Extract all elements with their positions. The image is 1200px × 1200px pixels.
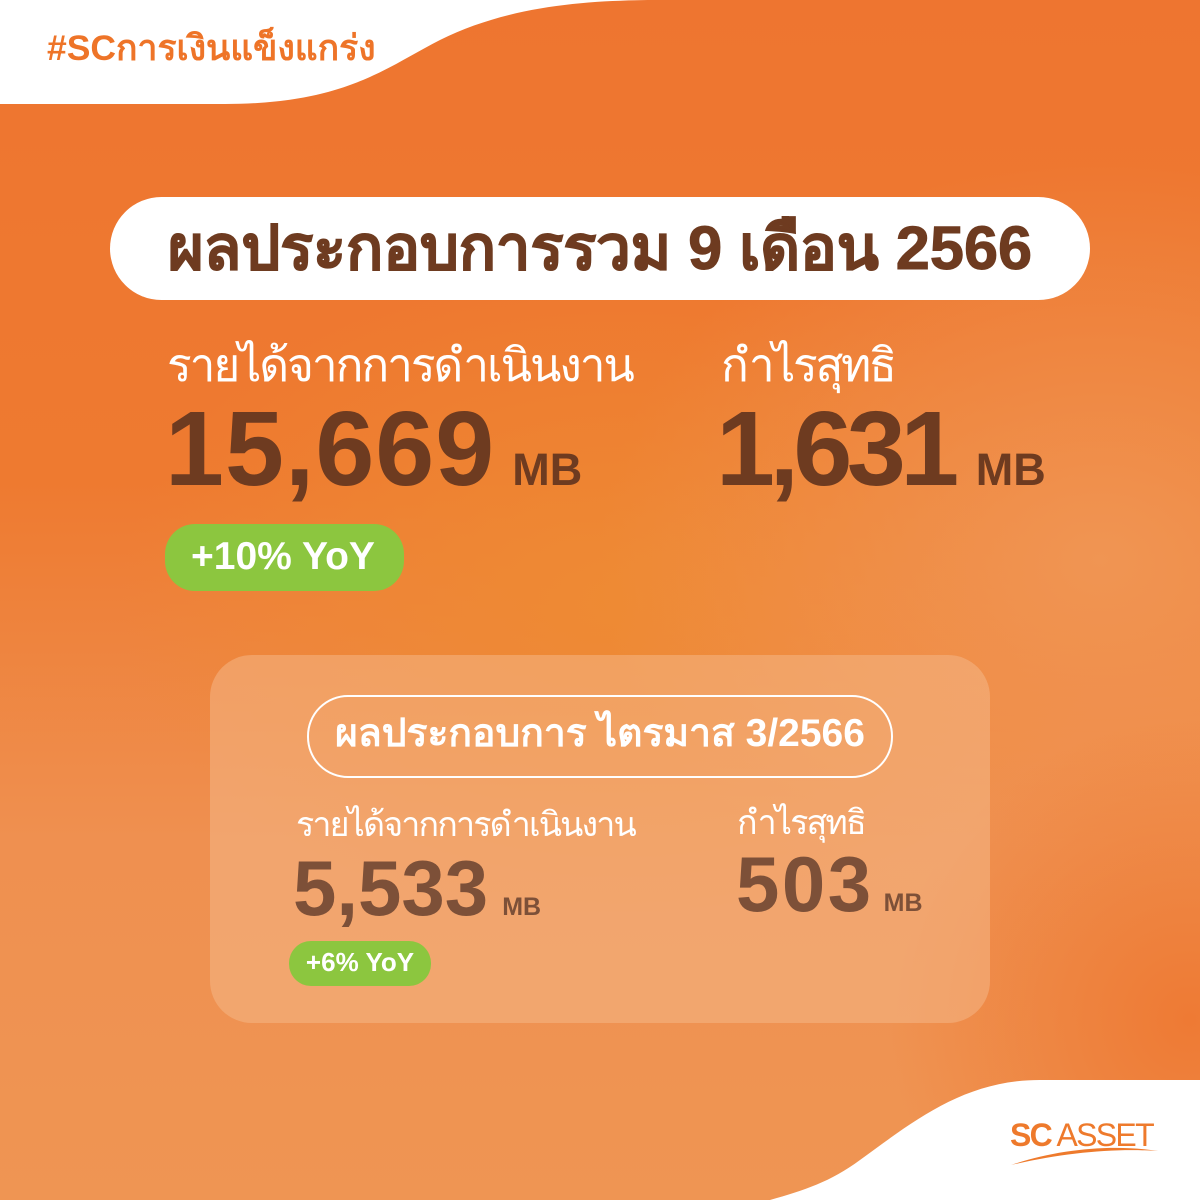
net profit label: กำไรสุทธิ — [721, 339, 895, 391]
quarter revenue value: 5,533 MB — [293, 844, 541, 932]
bottom-right white wave — [770, 1080, 1200, 1200]
net profit value: 1,631 MB — [716, 390, 1046, 508]
quarter heading pill — [307, 695, 893, 778]
main heading pill — [110, 197, 1090, 300]
quarter revenue YoY badge: +6% YoY — [306, 947, 414, 977]
panel: quarter results — [210, 655, 990, 1023]
revenue YoY badge: +10% YoY — [191, 535, 375, 578]
logo: SC Asset — [1010, 1117, 1158, 1165]
top-left white wave — [0, 0, 660, 104]
hashtag: #SCการเงินแข็งแกร่ง — [47, 28, 376, 68]
revenue label: รายได้จากการดำเนินงาน — [167, 339, 633, 391]
quarter profit label: กำไรสุทธิ — [737, 804, 865, 842]
revenue YoY badge — [165, 524, 404, 591]
quarter revenue YoY badge — [289, 941, 431, 986]
logo swoosh — [1012, 1148, 1158, 1165]
main heading pill: ผลประกอบการรวม 9 เดือน 2566 — [168, 214, 1032, 282]
quarter heading pill: ผลประกอบการ ไตรมาส 3/2566 — [335, 712, 865, 755]
quarter profit value: 503 MB — [736, 840, 923, 928]
revenue value: 15,669 MB — [165, 390, 582, 508]
quarter revenue label: รายได้จากการดำเนินงาน — [296, 806, 635, 844]
logo text: SC ASSET — [1010, 1117, 1153, 1153]
